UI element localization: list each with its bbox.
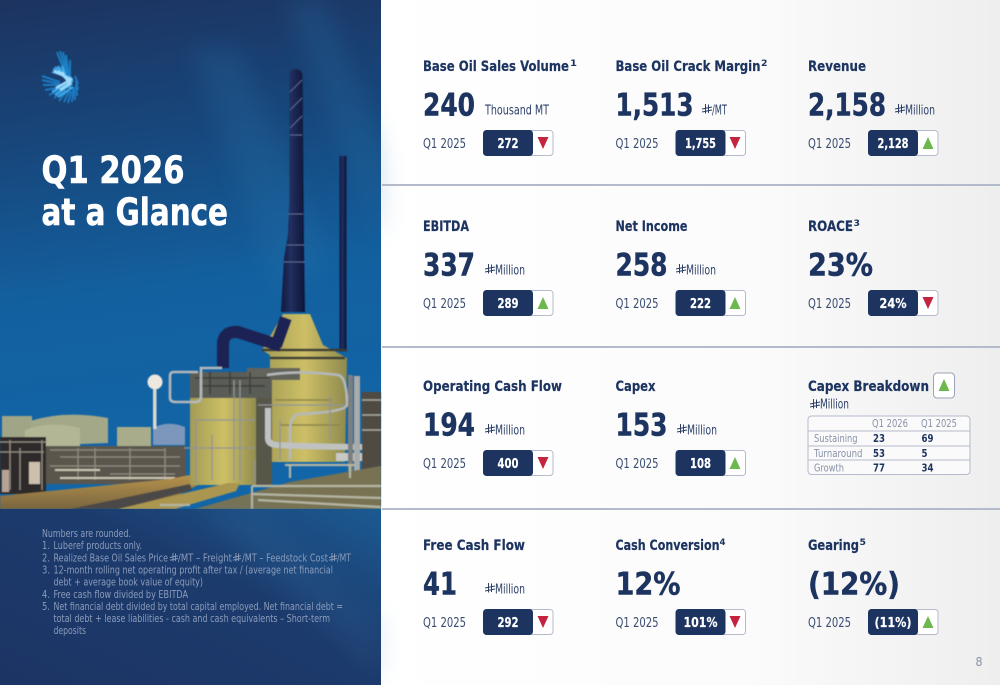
footnote text: 12-month rolling net operating profit after tax / (average net financial <box>54 564 333 576</box>
KPI: Base Oil Sales Volume: 240 <box>423 88 475 124</box>
KPI: Cash Conversion: 12% <box>616 566 680 602</box>
KPI: Base Oil Sales Volume: 1 <box>570 59 577 69</box>
KPI: EBITDA <box>423 219 553 316</box>
KPI: EBITDA: Million <box>495 264 525 278</box>
icon: up arrow box <box>934 373 954 398</box>
KPI: Operating Cash Flow <box>423 379 562 476</box>
KPI: Net Income: 222 <box>690 296 711 312</box>
KPI: ROACE <box>808 219 938 316</box>
KPI: Revenue: Million <box>905 104 935 118</box>
footnote text <box>42 528 351 637</box>
title <box>42 149 228 234</box>
KPI: Cash Conversion: Cash Conversion <box>616 538 720 554</box>
KPI: Base Oil Crack Margin: 1,755 <box>685 136 716 152</box>
footnote text: 4. <box>42 589 50 601</box>
capex table: 53 <box>873 448 885 460</box>
KPI: Free Cash Flow <box>423 538 553 635</box>
KPI: Cash Conversion <box>616 538 746 635</box>
title: at a Glance <box>42 191 228 234</box>
KPI: Base Oil Sales Volume: Base Oil Sales Volume <box>423 59 569 75</box>
KPI: Cash Conversion: 101% <box>684 615 718 631</box>
KPI: Free Cash Flow: Q1 2025 <box>423 616 466 631</box>
footnote text: Luberef products only. <box>54 540 142 552</box>
KPI: Revenue: Revenue <box>808 59 866 75</box>
panel: footnotes <box>0 509 381 685</box>
KPI: Base Oil Crack Margin: /MT <box>712 104 727 118</box>
footnote text: /MT – Feedstock Cost <box>242 552 328 564</box>
KPI: Operating Cash Flow: Million <box>495 424 525 438</box>
KPI: Gearing: 5 <box>860 538 866 548</box>
lower tower <box>190 395 258 485</box>
KPI: Free Cash Flow: 41 <box>423 566 457 602</box>
title: Q1 2026 <box>42 149 184 192</box>
footnote text: Numbers are rounded. <box>42 528 131 540</box>
KPI: ROACE: Q1 2025 <box>808 297 851 312</box>
page number: 8 <box>976 655 982 669</box>
KPI: EBITDA: 289 <box>498 296 518 312</box>
capex table: 77 <box>873 462 885 474</box>
capex table: 23 <box>873 433 885 445</box>
KPI: Base Oil Crack Margin: Q1 2025 <box>616 137 658 152</box>
KPI: Base Oil Sales Volume: Thousand MT <box>484 104 549 118</box>
silver pipes <box>170 368 347 460</box>
capex table: Sustaining <box>814 433 858 445</box>
KPI: Gearing: (12%) <box>808 566 900 602</box>
KPI: Operating Cash Flow: Operating Cash Flow <box>423 379 562 395</box>
KPI: ROACE: ROACE <box>808 219 853 235</box>
KPI: Capex Breakdown: Capex Breakdown <box>808 379 929 395</box>
KPI: Capex: Million <box>687 424 717 438</box>
footnote text: debt + average book value of equity) <box>54 576 203 588</box>
panel: refinery photo <box>0 0 381 509</box>
railings and ladders <box>184 380 345 484</box>
KPI: Capex: 108 <box>690 456 711 472</box>
KPI: Capex Breakdown: Million <box>820 398 849 412</box>
KPI: Gearing: Q1 2025 <box>808 616 851 631</box>
KPI: Free Cash Flow: Million <box>495 582 525 598</box>
KPI: Revenue <box>808 59 938 156</box>
footnote text: 1. <box>42 540 50 552</box>
capex table: 34 <box>922 462 934 474</box>
capex table: 69 <box>922 433 934 445</box>
upper tower <box>262 314 347 462</box>
capex table: Growth <box>814 462 844 474</box>
KPI: Gearing <box>808 538 938 635</box>
KPI: Revenue: Q1 2025 <box>808 137 851 152</box>
KPI: Net Income: Net Income <box>616 219 688 235</box>
KPI: Gearing: Gearing <box>808 538 859 554</box>
KPI: Net Income <box>616 219 746 316</box>
KPI: EBITDA: 337 <box>423 248 475 284</box>
ground <box>0 474 200 509</box>
row dividers <box>382 184 1000 510</box>
KPI: Cash Conversion: 4 <box>720 538 726 548</box>
KPI: Capex: Q1 2025 <box>616 457 658 472</box>
duct pipe <box>223 332 281 368</box>
KPI: Free Cash Flow: 292 <box>498 615 518 631</box>
KPI: Operating Cash Flow: 400 <box>498 456 518 472</box>
KPI: Base Oil Sales Volume: 272 <box>498 136 518 152</box>
KPI: Free Cash Flow: Free Cash Flow <box>423 538 525 554</box>
capex table <box>808 416 970 474</box>
footnote text: total debt + lease liabilities - cash and cash equivalents – Short-term <box>54 613 330 625</box>
KPI: Net Income: Million <box>686 264 716 278</box>
footnote text: 2. <box>42 552 50 564</box>
KPI: Base Oil Crack Margin: 2 <box>761 59 768 69</box>
KPI: Net Income: Q1 2025 <box>616 297 658 312</box>
icon: tall flare stack <box>281 69 346 351</box>
storage tanks <box>2 416 32 442</box>
KPI: Base Oil Crack Margin <box>616 59 768 156</box>
pipe rack left <box>0 437 46 494</box>
footnote text: 5. <box>42 601 50 613</box>
KPI: EBITDA: EBITDA <box>423 219 470 235</box>
KPI: Capex Breakdown <box>808 373 970 474</box>
capex table: Turnaround <box>813 448 862 460</box>
KPI: ROACE: 23% <box>808 248 873 284</box>
page background <box>381 0 1000 685</box>
KPI: Base Oil Sales Volume <box>423 59 577 156</box>
KPI: Operating Cash Flow: 194 <box>423 408 475 444</box>
KPI: Revenue: 2,128 <box>878 136 908 152</box>
footnote text: Realized Base Oil Sales Price <box>54 552 168 564</box>
KPI: Base Oil Sales Volume: Q1 2025 <box>423 137 466 152</box>
footnote text: Free cash flow divided by EBITDA <box>54 589 189 601</box>
footnote text: deposits <box>54 625 86 637</box>
KPI: Gearing: (11%) <box>874 615 912 631</box>
KPI: Net Income: 258 <box>616 248 668 284</box>
footnote text: /MT <box>337 552 351 564</box>
capex table: 5 <box>922 448 928 460</box>
KPI: Capex: Capex <box>616 379 656 395</box>
KPI: Base Oil Crack Margin: Base Oil Crack Margin <box>616 59 760 75</box>
KPI: Capex <box>616 379 746 476</box>
water tower <box>148 374 162 390</box>
illustration: refinery plant <box>0 314 381 509</box>
KPI: Base Oil Crack Margin: 1,513 <box>616 88 694 124</box>
KPI: Capex: 153 <box>616 408 668 444</box>
footnote text: Net financial debt divided by total capital employed. Net financial debt = <box>54 601 343 613</box>
capex table: Q1 2026 <box>872 418 908 430</box>
foreground pipes and beams <box>118 483 240 509</box>
platform machinery <box>190 372 272 398</box>
footnote text: 3. <box>42 564 50 576</box>
KPI: Operating Cash Flow: Q1 2025 <box>423 457 466 472</box>
capex table: Q1 2025 <box>921 418 957 430</box>
KPI: ROACE: 24% <box>880 296 907 312</box>
icon: company logo <box>42 51 78 103</box>
KPI: EBITDA: Q1 2025 <box>423 297 466 312</box>
KPI: Cash Conversion: Q1 2025 <box>616 616 658 631</box>
footnote text: /MT – Freight <box>178 552 232 564</box>
KPI: Revenue: 2,158 <box>808 88 886 124</box>
KPI: ROACE: 3 <box>854 219 860 229</box>
